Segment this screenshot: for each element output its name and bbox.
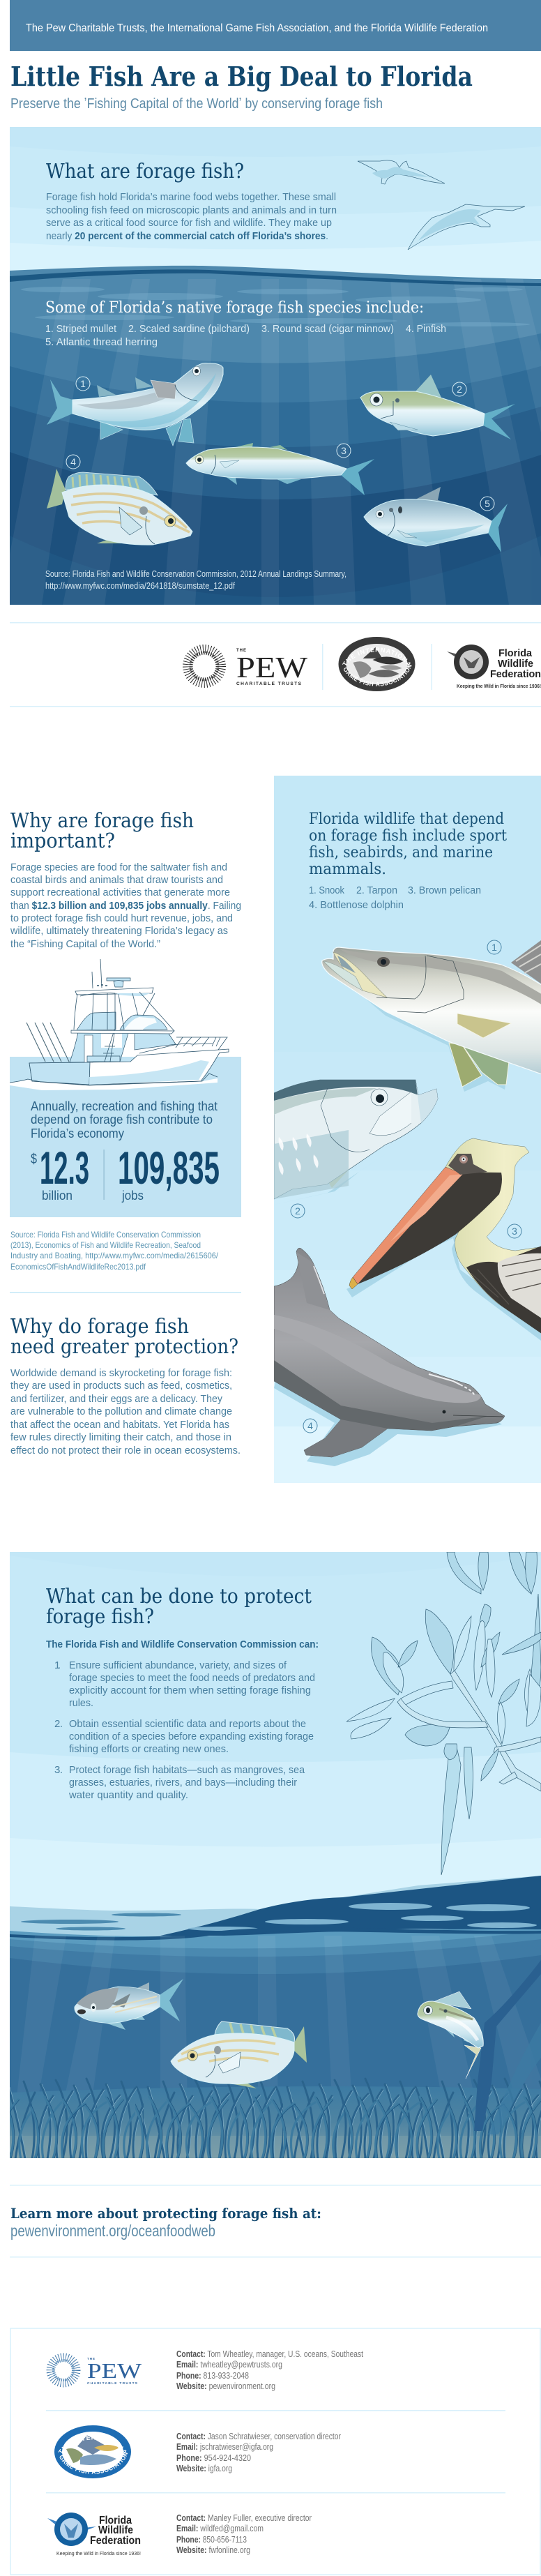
logo: FWF blue: Federation [90,2535,141,2547]
logo: Florida Wildlife Federation: Wildlife [498,658,533,670]
economy source note [10,1230,219,1272]
heading: why protection: need greater protection? [10,1334,238,1358]
economy source note: Source: Florida Fish and Wildlife Conservation Commission [10,1230,201,1240]
icon: seabird upper [358,160,445,184]
recommendation 3 [54,1764,305,1801]
stat: 12.3 billion [31,1142,89,1203]
contact panel [10,2328,541,2575]
economy source note: EconomicsOfFishAndWildlifeRec2013.pdf [10,1262,146,1272]
importance body text: wildlife, ultimately threatening Florida’s legacy as [10,925,228,937]
callout text: Florida’s economy [31,1127,124,1140]
stat: 12.3 billion: $ [31,1152,37,1167]
heading: why important: Why are forage fish [10,808,194,832]
sky background [10,127,541,293]
top banner: The Pew Charitable Trusts, the International Game Fish Association, and the Florida Wildlife Federation [26,22,488,34]
label 2 [291,1204,305,1218]
subtitle: Preserve the ʼFishing Capital of the Worldʼ by conserving forage fish [10,96,383,112]
importance body text [10,861,241,950]
heading: What are forage fish? [46,159,244,183]
logo: Pew: CHARITABLE TRUSTS [236,681,302,686]
sky background [10,1552,541,1925]
label 4 [303,1419,317,1433]
water background [0,266,541,605]
intro text: Forage fish hold Florida’s marine food webs together. These small [46,191,336,203]
heading: fish, seabirds, and marine [309,844,493,861]
fish 4: pinfish [47,469,192,545]
label 2: 2 [457,384,462,395]
recommendation 1: explicitly account for them when setting forage fishing [69,1685,311,1696]
heading: mammals. [309,861,386,878]
learn more heading: Learn more about protecting forage fish at: [10,2205,321,2222]
label 1 [487,940,501,954]
intro text: schooling fish feed on microscopic plants and animals and in turn [46,204,337,216]
wildlife list [309,884,481,911]
icon: seabird lower [408,204,525,250]
wildlife list: 2. Tarpon [356,884,397,896]
importance body text: coastal birds and animals that draw tourists and [10,874,223,886]
heading: What can be done to protect [46,1584,312,1608]
label 2 [452,382,466,396]
heading: why important [10,808,194,852]
contact: Pew: Contact: Tom Wheatley, manager, U.S. oceans, Southeast [176,2349,363,2359]
fish A [75,1979,183,2030]
recommendation 2 [54,1718,314,1755]
illustration: tarpon [274,1080,446,1205]
contact: IGFA [176,2431,342,2473]
title: Little Fish Are a Big Deal to Florida [10,61,473,92]
heading: Florida wildlife that depend [309,811,504,828]
recommendation 2: 2. [54,1718,63,1730]
logo: FWF blue: Keeping the Wild in Florida since 1936! [56,2550,141,2556]
protection body text: that affect the ocean and habitats. Yet Florida has [10,1419,229,1431]
fish 1: striped mullet [47,363,223,446]
logo: Pew blue: CHARITABLE TRUSTS [87,2381,138,2386]
species list: 4. Pinfish [406,323,446,335]
wildlife list: 3. Brown pelican [408,884,481,896]
learn more url: pewenvironment.org/oceanfoodweb [10,2222,215,2240]
partner logo strip [10,622,541,707]
recommendation 3: 3. [54,1764,63,1776]
recommendation 3: water quantity and quality. [68,1789,188,1801]
contact: IGFA: Website: igfa.org [176,2463,232,2473]
label 1: 1 [80,378,86,389]
panel: what are forage fish [0,127,541,605]
underwater background [10,1927,541,2158]
label 4: 4 [307,1420,313,1431]
contact: Pew [176,2349,363,2391]
contact: FWF [176,2513,312,2555]
protection body text: few rules directly limiting their catch, and those in [10,1431,231,1443]
panel: economy callout [10,959,241,1217]
contact: FWF: Website: fwfonline.org [176,2545,250,2555]
logo: FWF blue: Wildlife [98,2524,133,2536]
species list: 1. Striped mullet [45,323,117,335]
logo: Pew blue [50,2357,142,2386]
heading [46,1584,312,1628]
logo: Pew blue: THE [87,2357,95,2360]
logo: International Game Fish Association [339,637,416,691]
logo: IGFA blue: GAME FISH ASSOCIATION [60,2452,128,2474]
importance body text: Forage species are food for the saltwater fish and [10,861,227,873]
importance body text: support recreational activities that generate more [10,887,230,898]
recommendation 1: Ensure sufficient abundance, variety, and sizes of [69,1659,287,1671]
contact: IGFA: Contact: Jason Schratwieser, conservation director [176,2431,342,2441]
logo: Pew: THE [236,649,246,653]
protection body text [10,1367,241,1456]
source note: Source: Florida Fish and Wildlife Conservation Commission, 2012 Annual Landings Summary, [45,568,346,579]
fish C [418,1991,483,2079]
contact: FWF: Phone: 850-656-7113 [176,2534,247,2545]
label 2: 2 [295,1205,300,1217]
stat: 12.3 billion: billion [42,1189,73,1203]
label 1 [76,377,90,391]
protection body text: are vulnerable to the pollution and climate change [10,1406,232,1417]
intro text [46,191,337,242]
logo: Pew blue: PEW [87,2358,142,2383]
heading: why protection: Why do forage fish [10,1314,189,1338]
importance body text: to protect forage fish could hurt revenue, jobs, and [10,912,233,924]
label 3 [337,444,351,458]
heading: forage fish? [46,1604,154,1628]
species list: 3. Round scad (cigar minnow) [261,323,394,335]
importance body text: than $12.3 billion and 109,835 jobs annually. Failing [10,900,241,912]
stat: 109,835 jobs: 109,835 [118,1142,220,1193]
wildlife list: 1. Snook [309,884,344,896]
stat: 109,835 jobs: jobs [121,1189,144,1203]
stat: 109,835 jobs [118,1142,220,1203]
contact: Pew: Email: twheatley@pewtrusts.org [176,2359,282,2370]
seabed and seagrass [10,2072,541,2159]
water surface [10,1876,541,2158]
recommendation 2: condition of a species before expanding existing forage [69,1731,314,1742]
logo: IGFA blue: THE INTERNATIONAL [59,2436,127,2454]
intro text: serve as a critical food source for fish and wildlife. They make up [46,217,332,229]
species list: 5. Atlantic thread herring [45,336,158,348]
recommendation 2: fishing efforts or creating new ones. [69,1743,229,1755]
contact: IGFA: Phone: 954-924-4320 [176,2453,251,2463]
heading [309,811,507,878]
recommendation 1: 1. [54,1659,61,1671]
wildlife list: 4. Bottlenose dolphin [309,899,404,911]
source note: http://www.myfwc.com/media/2641818/sumstate_12.pdf [45,580,235,591]
subheading: The Florida Fish and Wildlife Conservation Commission can: [46,1639,319,1650]
species heading: Some of Florida’s native forage fish species include: [45,299,424,317]
economy source note: (2013), Economics of Fish and Wildlife Recreation, Seafood [10,1240,201,1250]
label 4 [66,455,80,469]
logo: IGFA blue [54,2425,131,2478]
panel: what can be done [10,1552,541,2159]
protection body text: they are used in products such as feed, cosmetics, [10,1380,232,1392]
stat: 12.3 billion: 12.3 [40,1142,89,1193]
logo: FWF blue: Florida [99,2515,132,2526]
contact: Pew: Website: pewenvironment.org [176,2381,275,2391]
logo: International Game Fish Association: THE INTERNATIONAL [342,647,411,667]
logo: Florida Wildlife Federation [447,645,541,689]
intro text: nearly 20 percent of the commercial catch off Florida’s shores. [46,230,328,242]
logo: Florida Wildlife Federation: Florida [498,647,533,659]
contact: IGFA: Email: jschratwieser@igfa.org [176,2441,273,2452]
recommendation 3: Protect forage fish habitats—such as mangroves, sea [69,1764,305,1776]
logo: International Game Fish Association: GAME FISH ASSOCIATION [344,664,412,686]
illustration: snook [322,938,541,1092]
label 5: 5 [485,498,490,509]
recommendation 1: forage species to meet the food needs of predators and [69,1672,315,1684]
label 3: 3 [341,445,346,456]
illustration: brown pelican [346,1138,541,1343]
callout text: depend on forage fish contribute to [31,1113,213,1127]
mangrove root [474,1960,541,2134]
illustration: fishing boat [10,959,229,1090]
panel: Florida wildlife [274,776,541,1483]
label 1: 1 [492,942,497,953]
label 4: 4 [70,456,76,467]
heading: why protection [10,1314,238,1358]
fish 5: Atlantic thread herring [364,487,508,552]
logo: Pew: PEW [236,652,307,684]
source note [45,568,346,591]
recommendation 3: grasses, estuaries, rivers, and bays—including their [69,1777,297,1788]
importance body text: the “Fishing Capital of the World.” [10,938,160,950]
illustration: bottlenose dolphin [274,1248,505,1466]
label 3 [508,1224,521,1238]
contact: Pew: Phone: 813-933-2048 [176,2370,249,2381]
protection body text: effect do not protect their role in ocean ecosystems. [10,1445,241,1456]
recommendation 2: Obtain essential scientific data and reports about the [69,1718,306,1730]
species list [45,323,446,348]
fish 2: scaled sardine [360,375,515,439]
label 5 [480,497,494,511]
contact: FWF: Contact: Manley Fuller, executive director [176,2513,312,2523]
contact: FWF: Email: wildfed@gmail.com [176,2523,264,2533]
heading: why important: important? [10,829,115,852]
fish 3: round scad [186,443,374,495]
callout text: Annually, recreation and fishing that [31,1099,218,1113]
recommendation 1: rules. [69,1697,93,1709]
fish B [171,2021,307,2088]
panel background [274,776,541,1483]
protection body text: and fertilizer, and their eggs are a delicacy. They [10,1393,222,1405]
callout text [31,1099,218,1140]
protection body text: Worldwide demand is skyrocketing for forage fish: [10,1367,232,1379]
heading: on forage fish include sport [309,827,507,845]
species list: 2. Scaled sardine (pilchard) [128,323,250,335]
logo: Pew [187,649,307,686]
recommendation 1 [54,1659,315,1709]
top banner [10,0,541,51]
label 3: 3 [512,1226,517,1237]
economy source note: Industry and Boating, http://www.myfwc.com/media/2615606/ [10,1251,219,1260]
illustration: mangrove branches [346,1552,541,1875]
logo: FWF blue [47,2513,141,2556]
